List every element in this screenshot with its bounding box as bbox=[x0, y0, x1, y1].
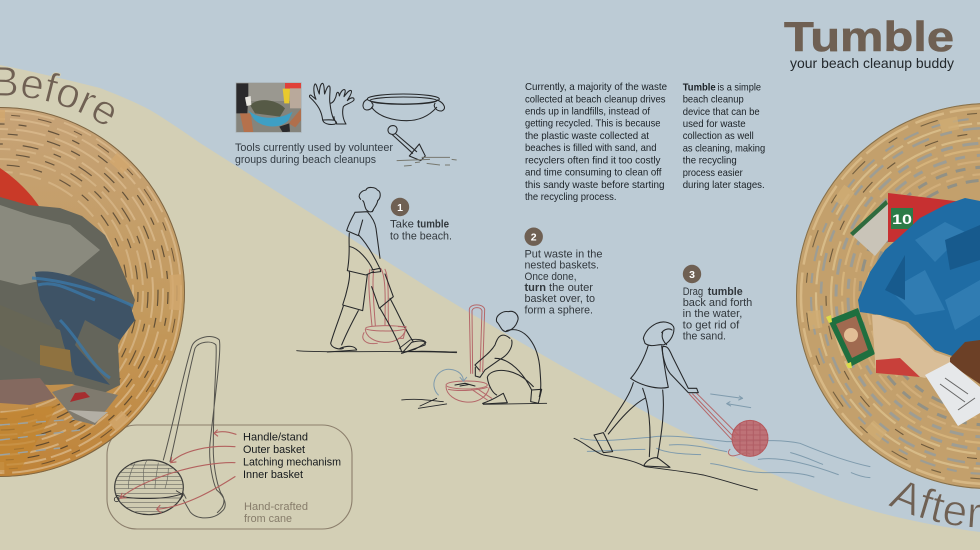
step 1 badge bbox=[391, 198, 409, 216]
illustration: person dragging tumble in water bbox=[574, 322, 870, 490]
step 2 text: nested baskets. bbox=[524, 260, 599, 272]
step 3 badge bbox=[683, 265, 701, 283]
text block: Tumble description bbox=[683, 82, 765, 191]
step 1 text: to the beach. bbox=[390, 230, 452, 242]
step 2 text: Once done, bbox=[524, 271, 576, 283]
step 2 text: turn bbox=[524, 282, 546, 294]
text block: Tumble description: process easier bbox=[683, 167, 743, 179]
text block: problem description: beaches is filled with sand, and bbox=[525, 142, 657, 154]
part labels: Handle/stand bbox=[243, 432, 308, 444]
step 1 text: Take bbox=[390, 219, 414, 231]
note: hand-crafted from cane: from cane bbox=[244, 513, 292, 525]
illustration: tumble device with callout arrows bbox=[113, 337, 236, 518]
left basket with waste bbox=[0, 107, 185, 477]
step 2 text: Put waste in the bbox=[524, 248, 602, 260]
illustration: person carrying tumble bbox=[297, 187, 457, 353]
photo: volunteers with tub bbox=[236, 83, 301, 132]
subtitle: your beach cleanup buddy bbox=[790, 55, 954, 71]
text block: Tumble description: beach cleanup bbox=[683, 94, 744, 106]
part labels: Latching mechanism bbox=[243, 456, 341, 468]
text block: Tumble description: the recycling bbox=[683, 155, 737, 167]
red packet bbox=[888, 193, 980, 242]
text block: problem description: the recycling process. bbox=[525, 191, 616, 203]
text block: problem description bbox=[525, 81, 667, 203]
handle and stand bbox=[163, 337, 225, 518]
callout arrows bbox=[120, 430, 236, 513]
text block: Tumble description: Tumble bbox=[683, 82, 716, 94]
text block: problem description: collected at beach cleanup drives bbox=[525, 93, 666, 105]
grey and blue waste bbox=[0, 197, 135, 395]
text block: Tumble description: as cleaning, making bbox=[683, 142, 765, 154]
right basket with waste: 10 bbox=[892, 211, 912, 227]
part labels: Inner basket bbox=[243, 469, 303, 481]
text block: problem description: Currently, a majority of the waste bbox=[525, 81, 667, 93]
caption: current tools: groups during beach cleanups bbox=[235, 154, 376, 166]
panel: parts of tumble bbox=[107, 425, 352, 529]
step 2 text bbox=[524, 248, 602, 316]
step 2 text: basket over, to bbox=[524, 293, 595, 305]
text block: problem description: ends up in landfills, instead of bbox=[525, 105, 650, 117]
icon: gloves bbox=[309, 83, 354, 124]
step 3 text: in the water, bbox=[683, 308, 742, 320]
white wrapper bbox=[853, 204, 888, 256]
step 3 text: the sand. bbox=[683, 330, 726, 342]
step 1 badge: 1 bbox=[397, 202, 403, 214]
step 3 text: to get rid of bbox=[683, 319, 740, 331]
text block: Tumble description: device that can be bbox=[683, 106, 760, 118]
step 2 badge: 2 bbox=[531, 232, 537, 244]
illustration: person filling tumble bbox=[398, 305, 547, 408]
caption: current tools: Tools currently used by volunteer bbox=[235, 142, 393, 154]
text block: Tumble description: during later stages. bbox=[683, 179, 765, 191]
text block: problem description: the plastic waste collected at bbox=[525, 130, 649, 142]
note: hand-crafted from cane: Hand-crafted bbox=[244, 501, 308, 513]
spherical basket bbox=[113, 460, 183, 515]
white printed packet bbox=[925, 362, 980, 426]
step 3 text: back and forth bbox=[683, 297, 752, 309]
text block: problem description: this sandy waste before starting bbox=[525, 179, 665, 191]
step 2 text: form a sphere. bbox=[524, 304, 593, 316]
red plastic bbox=[0, 168, 46, 218]
brown wrapper bbox=[950, 340, 980, 384]
note: hand-crafted from cane bbox=[244, 501, 308, 525]
right basket with waste bbox=[796, 103, 980, 489]
text block: problem description: and time consuming to clean off bbox=[525, 167, 662, 179]
icon: shallow pan bbox=[363, 94, 444, 121]
blue plastic bag bbox=[858, 198, 980, 358]
text block: Tumble description: used for waste bbox=[683, 118, 746, 130]
caption: current tools bbox=[235, 142, 393, 166]
text block: Tumble description: collection as well bbox=[683, 130, 754, 142]
heading: Tumble: Tumble bbox=[784, 13, 954, 60]
text block: problem description: recyclers often find it too costly bbox=[525, 154, 661, 166]
step 1 text: tumble bbox=[417, 219, 449, 231]
translucent bag bbox=[872, 315, 958, 378]
text block: Tumble description: is a simple bbox=[718, 82, 761, 94]
step 2 text: the outer bbox=[549, 282, 593, 294]
step 2 badge bbox=[524, 228, 543, 246]
part labels: Outer basket bbox=[243, 444, 305, 456]
part labels bbox=[243, 432, 341, 481]
green sachet bbox=[828, 308, 875, 367]
step 1 text bbox=[390, 219, 452, 242]
step 3 text: Drag bbox=[683, 286, 703, 298]
step 3 text: tumble bbox=[708, 286, 743, 298]
icon: shovel bbox=[388, 126, 457, 166]
step 3 text bbox=[683, 286, 752, 342]
step 3 badge: 3 bbox=[689, 269, 695, 281]
text block: problem description: getting recycled. This is because bbox=[525, 118, 661, 130]
